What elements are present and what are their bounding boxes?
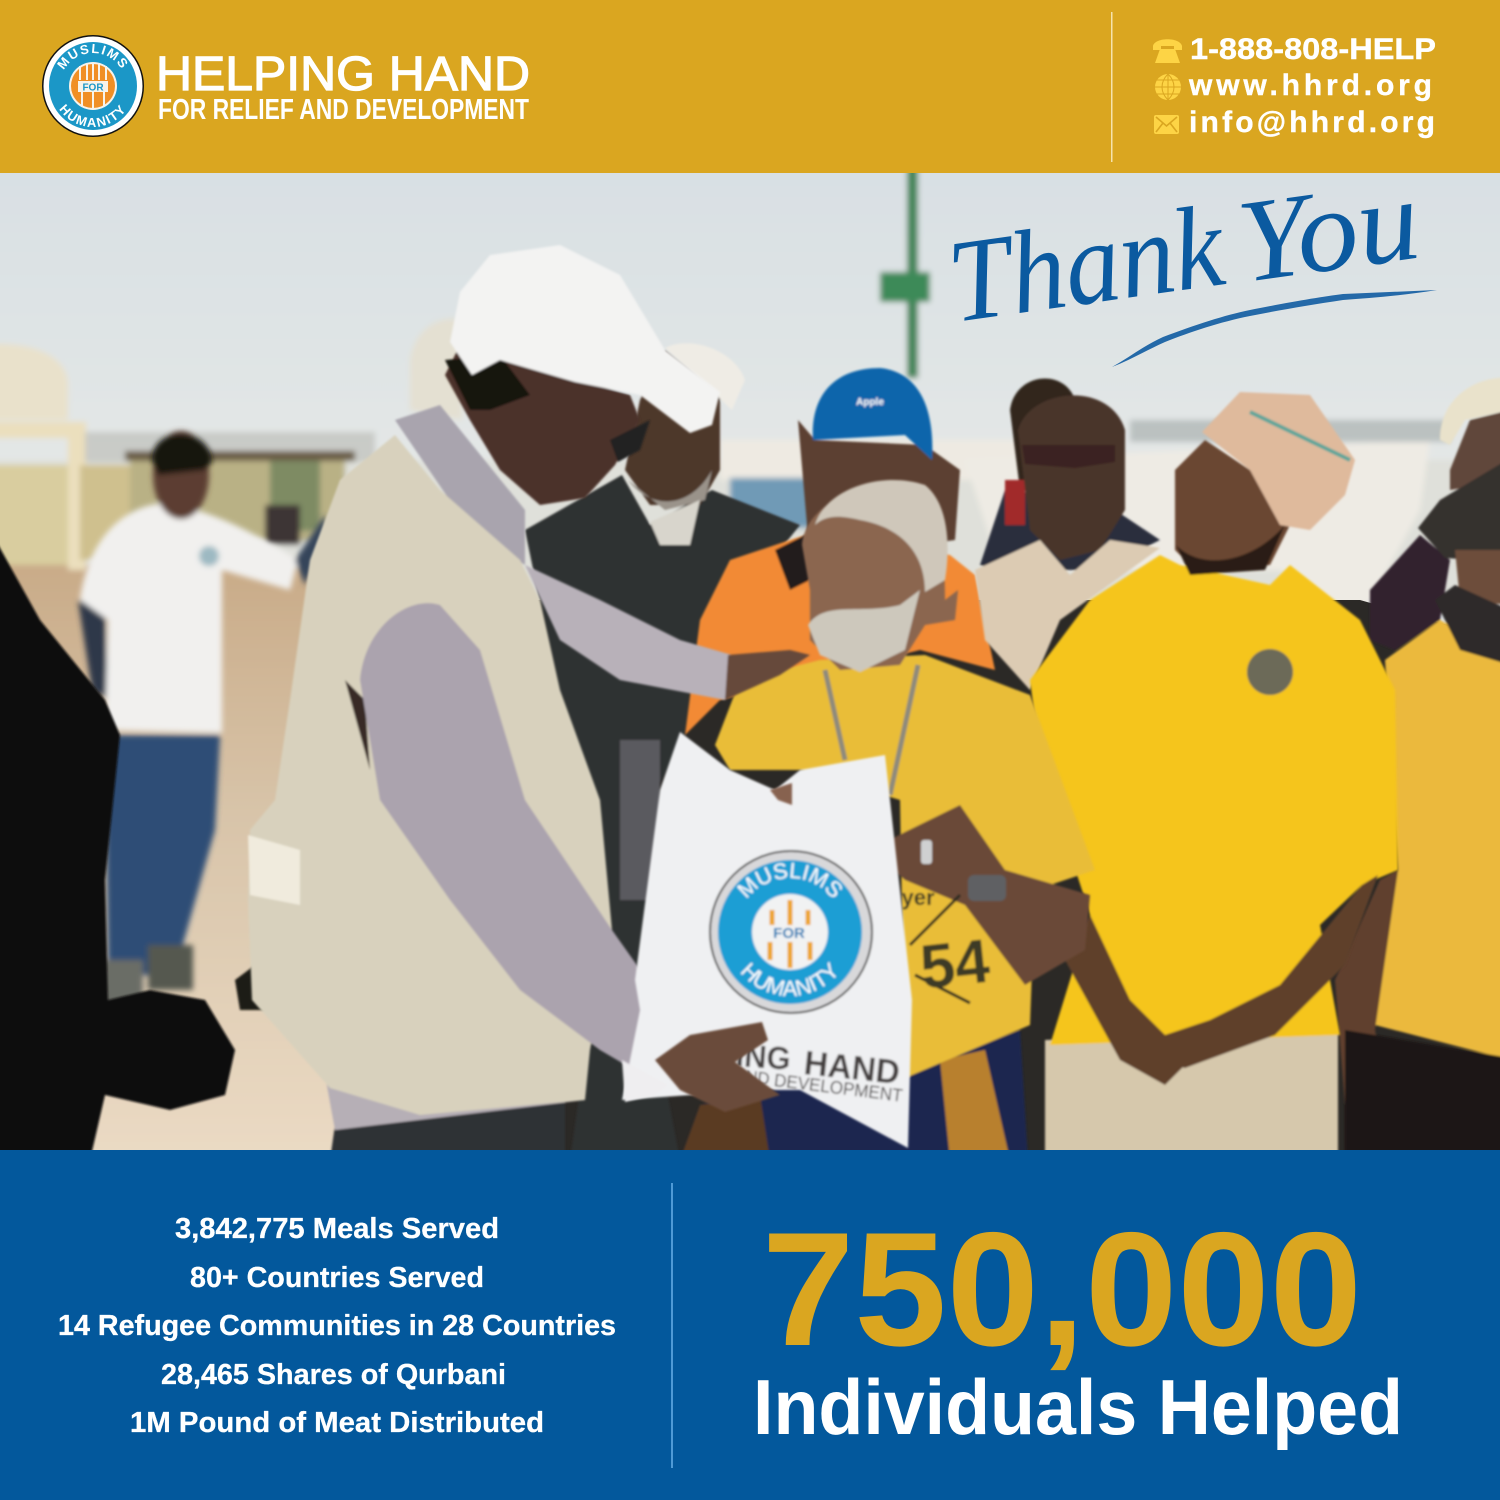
- logo: Muslims for Humanity roundel: HUMANITY: [59, 104, 124, 127]
- shopping bag with logo: HUMANITY: [739, 960, 838, 998]
- stats list: 14 Refugee Communities in 28 Countries: [58, 1310, 616, 1342]
- swash under Thank You: [1112, 290, 1437, 367]
- stats list: [58, 1213, 616, 1439]
- header divider: [1111, 12, 1112, 162]
- hands holding the bag: [622, 783, 792, 1112]
- person: man in blue cap and orange shirt: [685, 368, 995, 735]
- person: man in blue cap and orange shirt: Apple: [856, 397, 884, 408]
- logo: Muslims for Humanity roundel: FOR: [82, 82, 104, 94]
- footer divider: [671, 1183, 673, 1468]
- shopping bag with logo: ING: [735, 1037, 792, 1077]
- contact: website: www.hhrd.org: [1188, 69, 1432, 102]
- shopping bag with logo: [620, 731, 914, 1149]
- shopping bag with logo: HAND: [802, 1044, 902, 1092]
- Thank You script heading: Thank: [940, 179, 1233, 348]
- contact: email: info@hhrd.org: [1189, 106, 1435, 139]
- big number caption: Individuals Helped: [753, 1363, 1403, 1451]
- stats list: 3,842,775 Meals Served: [175, 1213, 499, 1245]
- icon: telephone: [1153, 39, 1182, 63]
- organisation name: FOR RELIEF AND DEVELOPMENT: [158, 94, 529, 126]
- footer band: [0, 1150, 1500, 1500]
- shopping bag with logo: AND DEVELOPMENT: [733, 1065, 904, 1106]
- person: man in sunglasses and patterned shirt: [975, 378, 1160, 690]
- shopping bag with logo: MUSLIMS: [736, 861, 844, 900]
- Thank You script heading: [940, 153, 1427, 348]
- header band: [0, 0, 1500, 173]
- photo: food distribution scene: [0, 173, 1500, 1150]
- person: elderly man in yellow shirt: yer: [901, 885, 935, 910]
- person: elderly man in yellow shirt: [680, 480, 1095, 1160]
- stats list: 1M Pound of Meat Distributed: [130, 1407, 544, 1439]
- person: man in dark shirt and white turban: [525, 343, 800, 1160]
- organisation name: HELPING HAND: [156, 48, 530, 101]
- person: figure in black at left: [0, 530, 270, 1160]
- icon: envelope: [1154, 115, 1179, 134]
- logo: Muslims for Humanity roundel: [42, 35, 144, 137]
- person: elderly man in yellow shirt: 54: [917, 927, 993, 1003]
- stats list: 28,465 Shares of Qurbani: [161, 1359, 506, 1391]
- person: man at far right in dotted yellow shirt: [1335, 378, 1500, 1160]
- shopping bag with logo: FOR: [773, 925, 805, 942]
- organisation name: [156, 48, 530, 126]
- person: background man in white shirt: [78, 431, 328, 1005]
- big number: 750,000: [762, 1199, 1362, 1380]
- logo: Muslims for Humanity roundel: MUSLIMS: [57, 44, 128, 70]
- person: aid worker in white cap and cream vest: [248, 245, 810, 1160]
- crowd shadow behind the foreground figures: [400, 600, 1500, 1150]
- person: man in bright yellow shirt and peach turban: [1030, 392, 1398, 1160]
- contact: phone: 1-888-808-HELP: [1190, 33, 1436, 66]
- background: sky, ground and buildings: [0, 140, 1500, 1185]
- stats list: 80+ Countries Served: [190, 1262, 484, 1294]
- icon: globe: [1155, 74, 1181, 100]
